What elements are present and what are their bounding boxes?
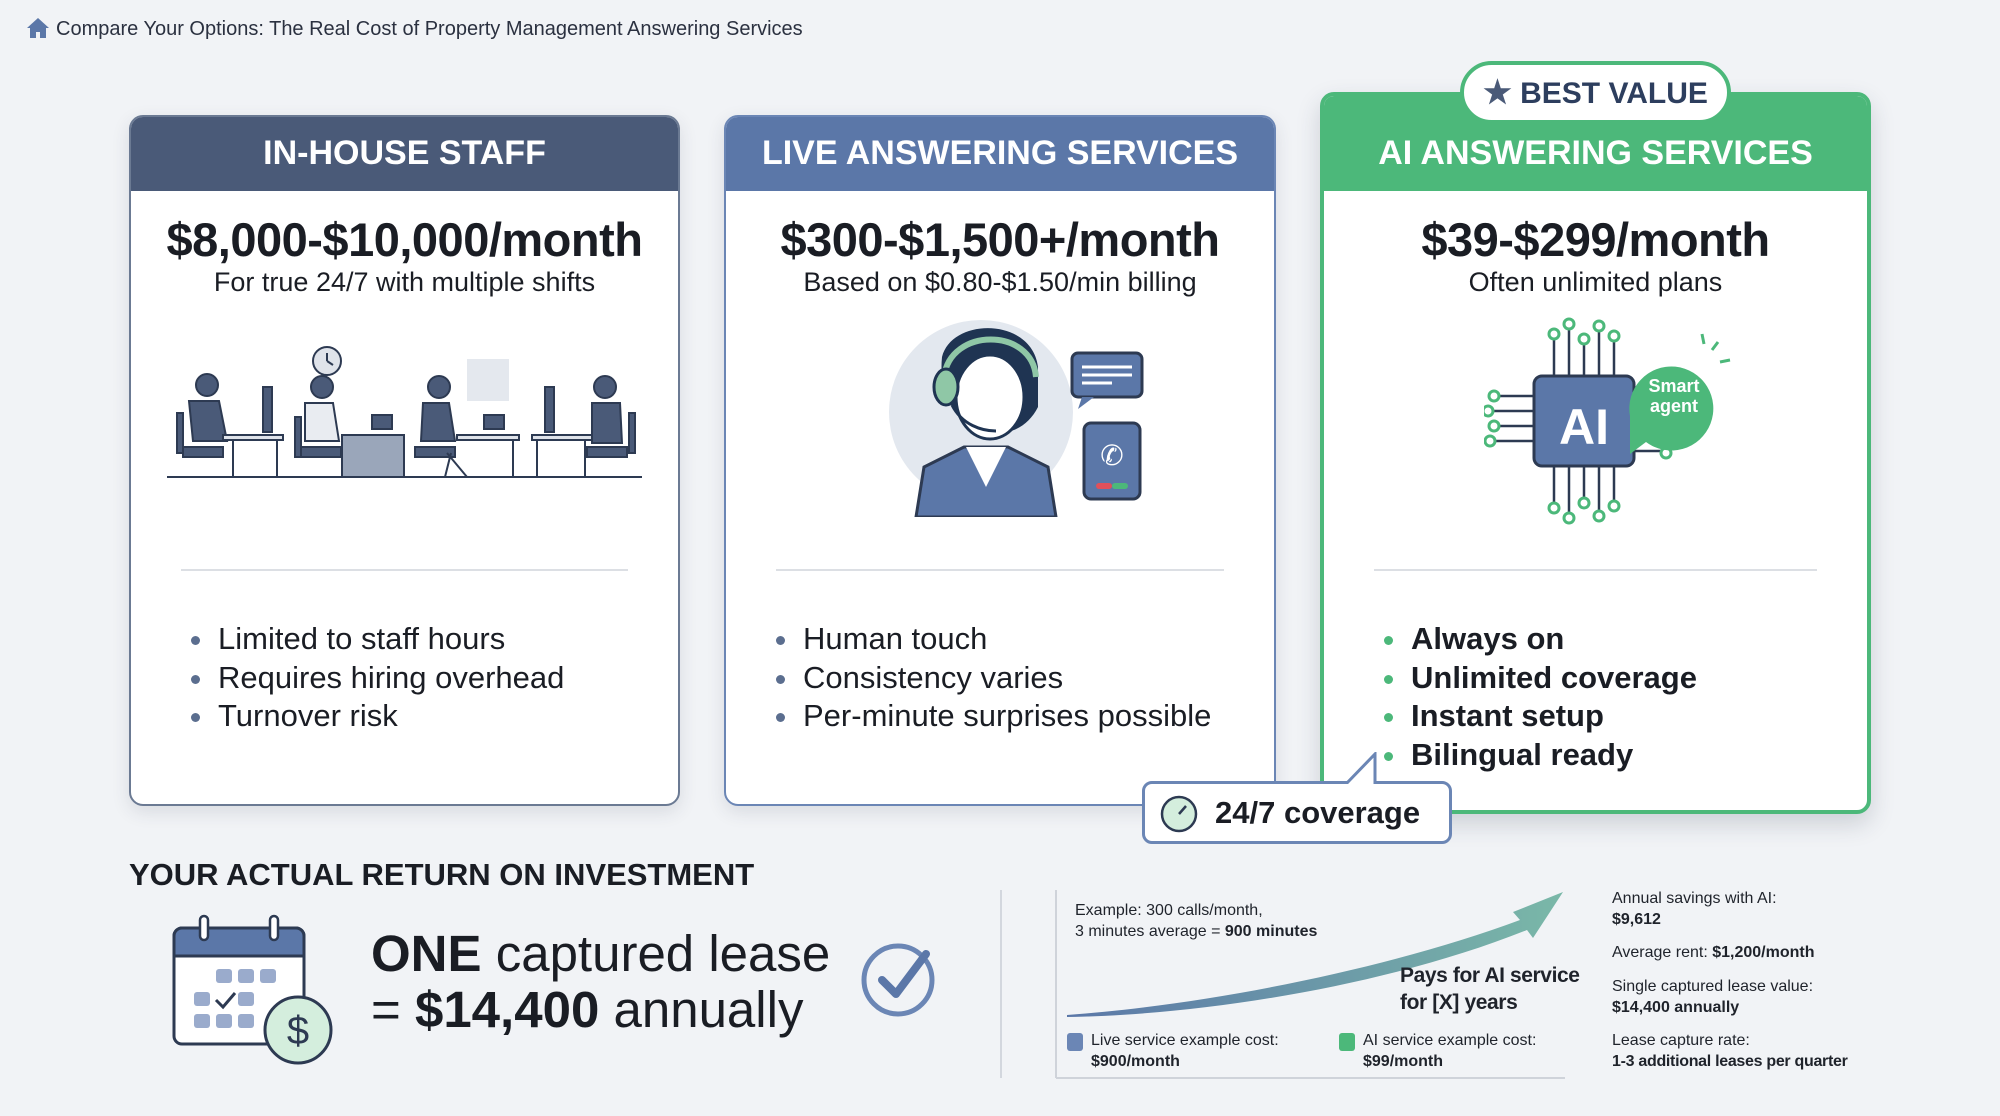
text: one captured lease — [371, 925, 830, 1038]
chart note: Example: 300 calls/month, — [1075, 902, 1263, 919]
icon: agent with headset — [889, 320, 1144, 517]
stats column: 1-3 additional leases per quarter — [1612, 1053, 1848, 1070]
price: $39-$299/month — [1421, 213, 1770, 266]
icon: agent with headset: ✆ — [1100, 440, 1124, 471]
stats column — [1612, 890, 1848, 1070]
callout: 24/7 coverage — [1142, 781, 1452, 844]
panel: in-house staff — [129, 115, 680, 806]
icon: ai chip: AI — [1559, 399, 1609, 455]
icon: ai chip: Smart — [1648, 376, 1700, 396]
legend: live: Live service example cost: — [1091, 1032, 1279, 1049]
bullets: Consistency varies — [803, 660, 1063, 694]
stats column: $14,400 annually — [1612, 999, 1739, 1016]
bullets: Requires hiring overhead — [218, 660, 564, 694]
bullets: Instant setup — [1411, 698, 1604, 733]
bullets: Turnover risk — [218, 698, 398, 733]
chart note: 3 minutes average = 900 minutes — [1075, 923, 1317, 940]
bullets: Unlimited coverage — [1411, 660, 1697, 694]
bullets — [776, 621, 1211, 733]
stats column: Average rent: $1,200/month — [1612, 944, 1814, 961]
legend: live: $900/month — [1091, 1053, 1180, 1070]
bullets — [191, 621, 564, 733]
subtitle: Based on $0.80-$1.50/min billing — [803, 267, 1197, 297]
stats column: Lease capture rate: — [1612, 1032, 1750, 1049]
heading — [726, 115, 1274, 191]
price: $8,000-$10,000/month — [167, 213, 642, 266]
legend: ai — [1339, 1032, 1536, 1070]
heading: in-house staff: IN-HOUSE STAFF — [263, 134, 546, 172]
stats column: Single captured lease value: — [1612, 978, 1813, 995]
chart: savings example — [1055, 890, 1580, 1079]
legend: ai: $99/month — [1363, 1053, 1443, 1070]
bullets: Bilingual ready — [1411, 736, 1633, 772]
panel: live answering services — [724, 115, 1276, 806]
chart label — [1400, 964, 1580, 1014]
heading: AI ANSWERING SERVICES — [1378, 134, 1813, 172]
badge: best value: ★ BEST VALUE — [1483, 74, 1708, 110]
chart label: Pays for AI service — [1400, 964, 1580, 987]
icon: calendar with dollar: $ — [287, 1009, 309, 1053]
heading — [1324, 92, 1867, 191]
bullets: Human touch — [803, 621, 987, 656]
price: $300-$1,500+/month — [780, 213, 1220, 266]
icon: check circle — [862, 944, 934, 1016]
bullets — [1384, 621, 1697, 772]
text: one captured lease: ONE captured lease — [371, 925, 830, 982]
bullets: Always on — [1411, 621, 1564, 656]
icon: ai chip — [1484, 318, 1730, 524]
icon: calendar with dollar — [172, 914, 332, 1064]
bullets: Limited to staff hours — [218, 621, 505, 656]
callout: 24/7 coverage: 24/7 coverage — [1215, 795, 1420, 830]
title: Compare Your Options: The Real Cost of Property Management Answering Services — [56, 18, 803, 40]
panel: ai answering services — [1320, 92, 1871, 814]
legend: ai: AI service example cost: — [1363, 1032, 1536, 1049]
bullets: Per-minute surprises possible — [803, 698, 1211, 733]
subtitle: Often unlimited plans — [1469, 267, 1722, 297]
text: one captured lease: = $14,400 annually — [371, 981, 803, 1038]
heading: LIVE ANSWERING SERVICES — [762, 134, 1238, 172]
subtitle: For true 24/7 with multiple shifts — [214, 267, 595, 297]
icon: ai chip: agent — [1650, 396, 1698, 416]
chart label: for [X] years — [1400, 991, 1517, 1014]
stats column: $9,612 — [1612, 911, 1661, 928]
chart note — [1075, 902, 1317, 940]
heading: in-house staff — [131, 115, 678, 191]
heading: roi: YOUR ACTUAL RETURN ON INVESTMENT — [129, 857, 754, 892]
icon: office workers — [167, 346, 642, 478]
badge: best value — [1460, 61, 1731, 124]
legend: live — [1067, 1032, 1279, 1070]
stats column: Annual savings with AI: — [1612, 890, 1777, 907]
